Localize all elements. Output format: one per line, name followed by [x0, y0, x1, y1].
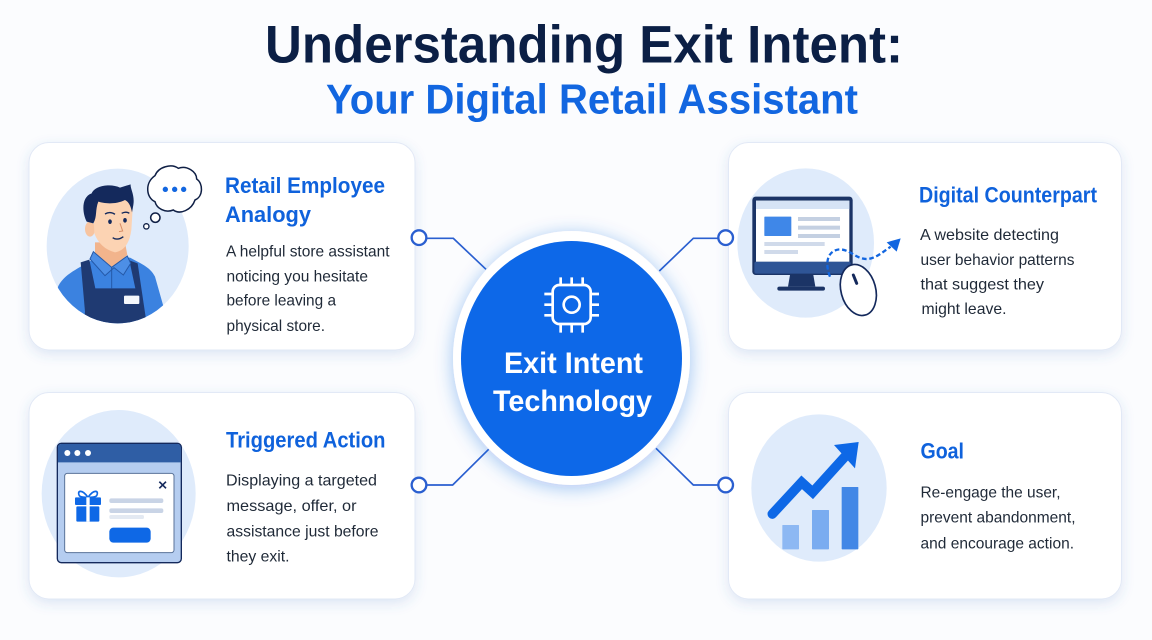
- panel: goal: [728, 392, 1122, 599]
- text block: might leave.: [922, 301, 1006, 318]
- text block: Displaying a targeted: [226, 472, 377, 490]
- text block: they exit.: [226, 548, 290, 566]
- heading: Retail Employee: [225, 173, 385, 198]
- panel: digital counterpart: [728, 142, 1122, 350]
- heading: Analogy: [225, 202, 312, 227]
- text block: [226, 244, 390, 335]
- hub label: [493, 347, 652, 418]
- connector: bottom right: [656, 448, 733, 492]
- central hub: exit intent technology: [453, 231, 690, 485]
- heading: Triggered Action: [226, 428, 386, 452]
- icon: microchip: [544, 277, 599, 333]
- title: Understanding Exit Intent:: [265, 16, 903, 74]
- heading: Digital Counterpart: [919, 182, 1098, 208]
- connector: bottom left: [412, 449, 489, 492]
- panel: triggered action: [29, 392, 415, 599]
- hub label: Technology: [493, 385, 652, 418]
- text block: user behavior patterns: [920, 252, 1074, 269]
- panel: retail employee analogy: [29, 142, 415, 350]
- heading: [225, 173, 385, 227]
- heading: Goal: [920, 438, 964, 464]
- connector lines: [412, 230, 733, 492]
- title: [265, 16, 903, 122]
- text block: physical store.: [226, 318, 325, 335]
- text block: [920, 227, 1074, 318]
- icon: monitor, mouse and dashed arrow: [737, 168, 901, 320]
- text block: message, offer, or: [226, 498, 357, 515]
- connector: top left: [412, 230, 486, 269]
- text block: before leaving a: [226, 292, 336, 310]
- icon: store employee with thought bubble: [47, 166, 201, 342]
- text block: A helpful store assistant: [226, 244, 390, 260]
- icon: growth chart with arrow: [751, 414, 887, 562]
- text block: noticing you hesitate: [226, 268, 368, 286]
- text block: prevent abandonment,: [920, 510, 1076, 526]
- text block: [226, 472, 379, 566]
- text block: A website detecting: [920, 227, 1059, 244]
- text block: assistance just before: [226, 524, 379, 540]
- icon: browser window with gift popup: [42, 410, 196, 577]
- subtitle: Your Digital Retail Assistant: [326, 76, 858, 122]
- text block: and encourage action.: [920, 536, 1074, 552]
- connector: top right: [659, 230, 733, 271]
- hub label: Exit Intent: [504, 347, 643, 380]
- text block: Re-engage the user,: [920, 484, 1060, 502]
- text block: that suggest they: [920, 276, 1044, 294]
- text block: [920, 484, 1076, 552]
